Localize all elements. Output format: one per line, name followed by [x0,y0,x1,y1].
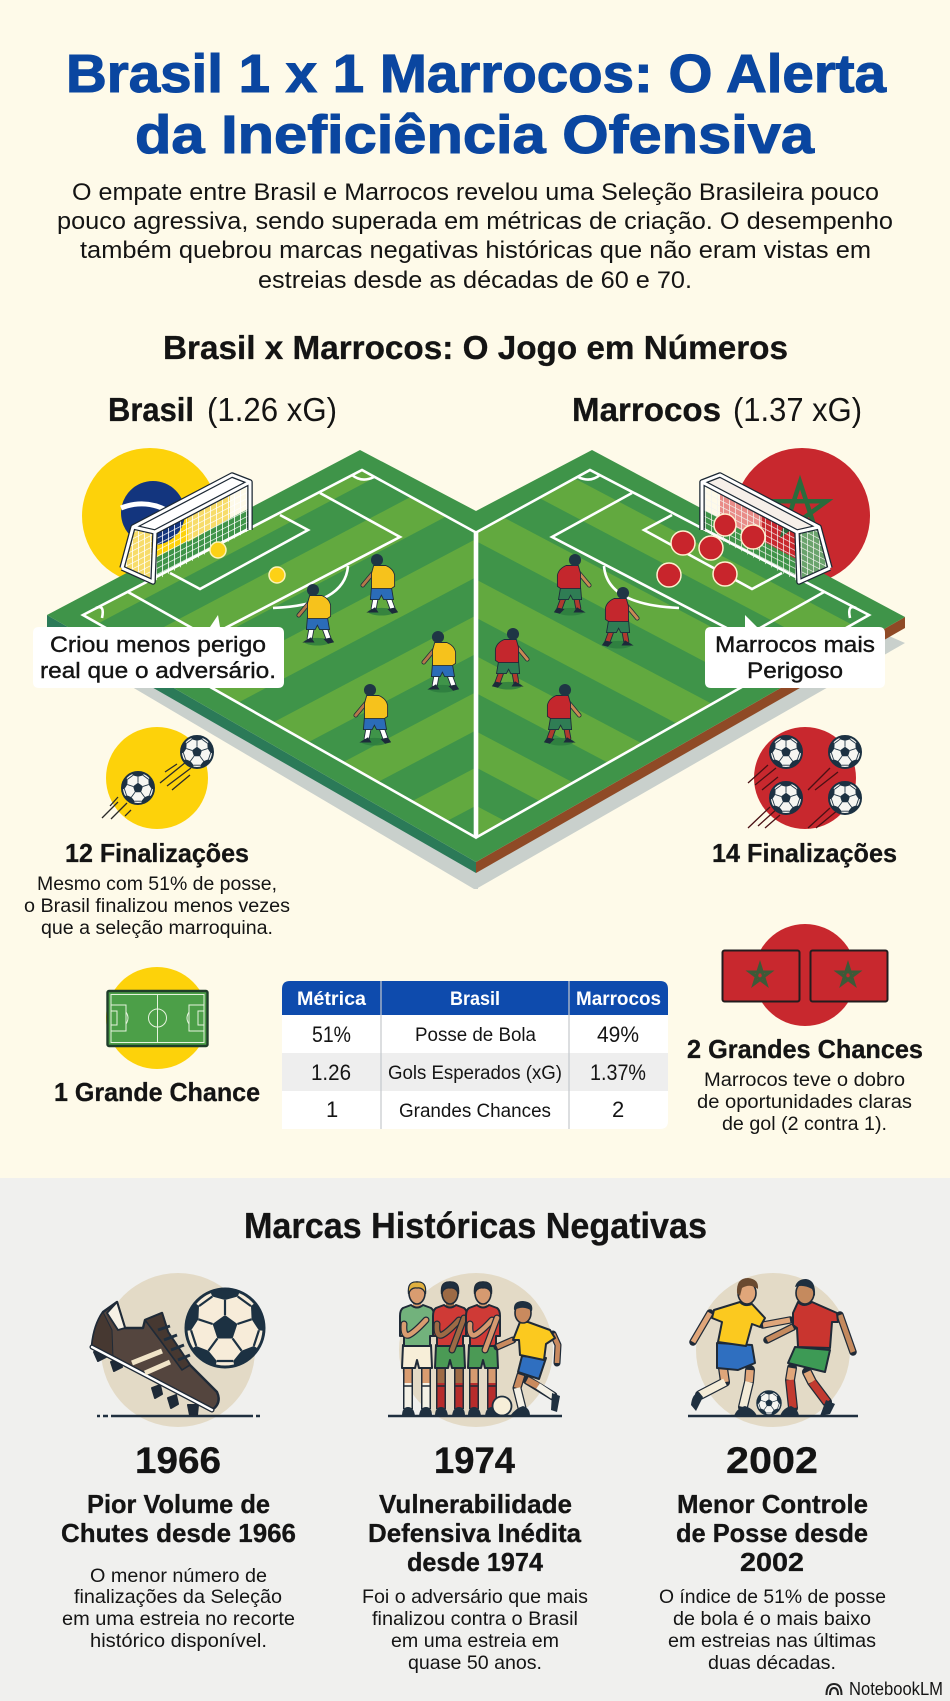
team label: Brasil xG: (1.26 xG) [207,391,337,428]
column: 1966: 1966 [135,1440,221,1481]
column: 2002: O índice de 51% de posse [659,1586,886,1608]
column: 1974: finalizou contra o Brasil [372,1608,578,1630]
column: 1966: Chutes desde 1966 [61,1518,296,1548]
column: 1966: finalizações da Seleção [74,1586,282,1608]
icon: Brazil shots [102,727,215,829]
comparison table: Brasil [450,989,500,1010]
column: 2002: em estreias nas últimas [668,1630,876,1652]
players: Morocco [493,554,637,746]
comparison table: Grandes Chances [399,1101,551,1122]
column: 1974: Defensiva Inédita [368,1518,582,1548]
stat: Brazil shots: o Brasil finalizou menos vezes [24,896,290,917]
column: 1966 [61,1440,296,1652]
column: 1974: Vulnerabilidade [379,1489,572,1519]
callout: Morocco [705,615,885,688]
icon: one big chance pitch [106,967,208,1069]
stat: Morocco big chances: de oportunidades claras [697,1092,912,1113]
stat: Brazil shots: que a seleção marroquina. [41,918,273,939]
callout: Brazil [33,615,284,688]
column: 2002 [659,1440,886,1674]
column: 2002: Menor Controle [677,1489,868,1519]
badge: Morocco flag circle [734,448,870,584]
stat: Brazil shots [24,838,290,939]
column: 1974: desde 1974 [407,1547,544,1577]
title: da Ineficiência Ofensiva [135,105,815,165]
intro paragraph [57,179,893,294]
goal: Morocco side [702,475,830,582]
team label: Marrocos xG: Marrocos [572,391,721,428]
panel: negative historic marks [0,1178,950,1701]
shot markers: Morocco [657,514,765,587]
column: 2002: duas décadas. [708,1652,836,1674]
callout: Morocco: Marrocos mais [715,632,875,657]
section heading: game in numbers: Brasil x Marrocos: O Jogo em Números [163,329,788,366]
comparison table: 49% [597,1022,639,1047]
comparison table: 51% [312,1022,351,1047]
icon: defensive wall [388,1273,562,1427]
column: 1966: O menor número de [90,1565,267,1587]
column: 2002: de Posse desde [676,1518,868,1548]
callout: Brazil: Criou menos perigo [50,632,266,657]
comparison table: Métrica [297,989,366,1010]
icon: boot and ball [92,1273,270,1427]
stat: Morocco big chances [687,1034,923,1135]
callout: Brazil: real que o adversário. [40,658,276,683]
column: 2002: de bola é o mais baixo [673,1608,871,1630]
intro paragraph: pouco agressiva, sendo superada em métricas de criação. O desempenho [57,208,893,235]
column: 1966: Pior Volume de [87,1489,270,1519]
goal: Brazil side [122,475,250,582]
column: 1974: quase 50 anos. [408,1652,542,1674]
stat: Brazil big chance: 1 Grande Chance [54,1077,260,1107]
team label: Marrocos xG [572,391,862,428]
comparison table: 1.26 [311,1060,351,1085]
team label: Brasil xG [108,391,337,428]
players: Brazil [299,554,458,746]
column: 1966: histórico disponível. [90,1630,267,1652]
column: 1974: 1974 [434,1440,515,1481]
stat: Brazil shots: 12 Finalizações [65,838,249,868]
heading: historic marks: Marcas Históricas Negativas [244,1205,707,1246]
stat: Brazil shots: Mesmo com 51% de posse, [37,874,277,895]
callout: Morocco: Perigoso [747,658,843,683]
logo: NotebookLM: NotebookLM [849,1679,943,1699]
intro paragraph: O empate entre Brasil e Marrocos revelou uma Seleção Brasileira pouco [72,179,879,206]
intro paragraph: também quebrou marcas negativas históricas que não eram vistas em [80,237,871,264]
icon: Morocco shots [748,727,863,829]
icon: duel between players [688,1273,858,1427]
stat: Morocco big chances: 2 Grandes Chances [687,1034,923,1064]
column: 1974: em uma estreia em [391,1630,559,1652]
comparison table: Marrocos [576,989,661,1010]
column: 1974 [362,1440,588,1674]
stat: Morocco big chances: Marrocos teve o dobro [704,1070,905,1091]
shot markers: Brazil [210,542,285,583]
comparison table: 1.37% [590,1060,646,1085]
stat: Morocco big chances: de gol (2 contra 1). [722,1114,887,1135]
stat: Morocco shots: 14 Finalizações [712,838,897,868]
column: 2002: 2002 [740,1547,804,1577]
comparison table: 2 [612,1097,624,1122]
comparison table: 1 [326,1097,338,1122]
comparison table: Posse de Bola [415,1025,536,1046]
comparison table [282,981,668,1129]
isometric pitch [47,419,905,889]
badge: Brazil flag circle [82,448,218,584]
page background [0,0,950,1178]
title: Brasil 1 x 1 Marrocos: O Alerta [66,44,887,104]
comparison table: Gols Esperados (xG) [388,1063,562,1084]
team label: Brasil xG: Brasil [108,391,194,428]
column: 2002: 2002 [726,1440,818,1481]
team label: Marrocos xG: (1.37 xG) [733,391,862,428]
column: 1966: em uma estreia no recorte [62,1608,295,1630]
title [66,44,887,165]
column: 1974: Foi o adversário que mais [362,1586,588,1608]
icon: two flags [722,924,888,1026]
intro paragraph: estreias desde as décadas de 60 e 70. [258,267,692,294]
